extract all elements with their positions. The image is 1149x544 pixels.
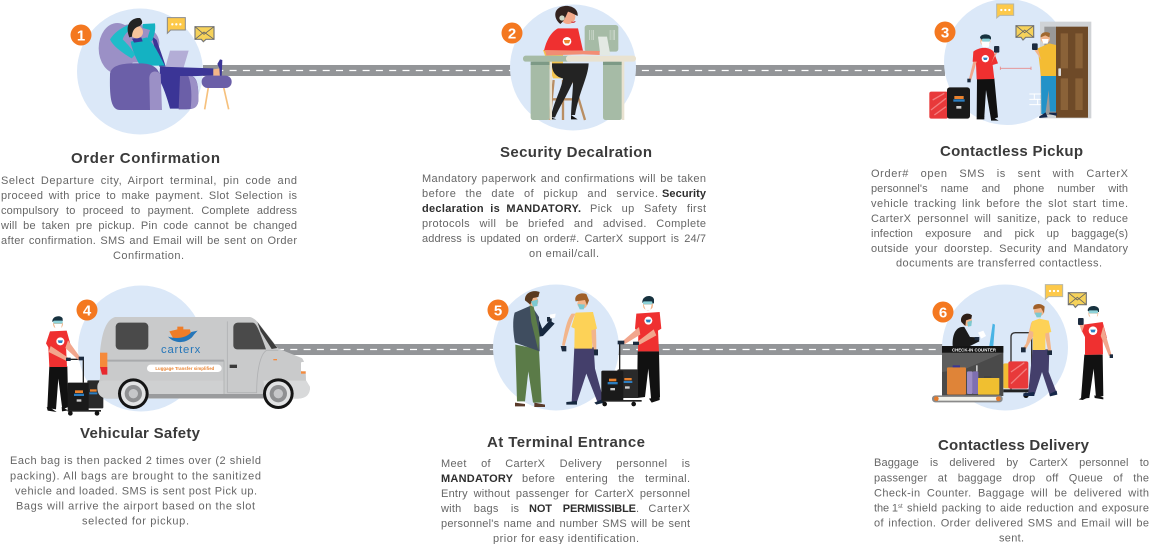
illustration: agent at desk <box>510 4 636 130</box>
label: van pill <box>147 365 222 372</box>
label: van pill: Luggage Transfer simplified <box>155 366 215 371</box>
badge: number 1 <box>70 24 92 46</box>
text block: contactless pickup: infection exposure and pick up baggage(s) <box>871 228 1128 240</box>
text block: contactless delivery <box>874 457 1149 544</box>
text block: at terminal entrance: NOT PERMISSIBLE <box>529 503 636 515</box>
text block: contactless delivery: shield packing to aide reduction and exposure <box>907 502 1149 514</box>
text block: vehicular safety: selected for pickup. <box>82 516 189 528</box>
badge: number 6 <box>932 302 954 322</box>
panel: step 5 at terminal entrance <box>440 284 691 544</box>
badge: number 1: 1 <box>77 28 85 44</box>
text block: at terminal entrance: MANDATORY <box>441 473 514 485</box>
text block: contactless delivery: st <box>898 504 903 510</box>
badge: number 4 <box>76 300 98 320</box>
text block: security declaration: Security <box>662 188 707 200</box>
panel: step 1 order confirmation <box>0 8 298 262</box>
text block: vehicular safety: Each bag is then packed 2 times over (2 shield <box>10 455 261 467</box>
badge: number 3 <box>934 22 956 42</box>
text block: contactless pickup: vehicle tracking link before the slot start time. <box>871 198 1128 210</box>
text block: at terminal entrance: Meet of CarterX Delivery personnel is <box>441 458 690 470</box>
text block: at terminal entrance <box>440 458 691 544</box>
road: bottom row <box>270 344 944 355</box>
logo: carterx on van: carterx <box>161 344 201 356</box>
text block: vehicular safety <box>10 455 261 528</box>
illustration: passengers and courier at terminal <box>493 284 661 410</box>
icon: chat bubble <box>167 18 185 33</box>
icon: envelope <box>1068 293 1086 307</box>
text block: at terminal entrance: personnel's name and number SMS will be sent <box>441 518 690 530</box>
panel: step 6 contactless delivery <box>874 284 1149 544</box>
badge: number 2: 2 <box>508 26 516 42</box>
heading: contactless pickup: Contactless Pickup <box>940 143 1083 160</box>
text block: security declaration: on email/call. <box>529 248 599 260</box>
panel: step 4 vehicular safety <box>10 286 310 528</box>
icon: envelope <box>195 27 214 42</box>
badge: number 4: 4 <box>83 302 92 320</box>
illustration: courier with trolley and van <box>46 286 310 416</box>
text block: security declaration: protocols will be briefed and advised. Complete <box>422 218 706 230</box>
text block: security declaration: declaration is MANDATORY. <box>422 203 581 215</box>
panel: step 2 security declaration <box>422 4 707 260</box>
logo: carterx on van <box>161 327 201 356</box>
badge: number 6: 6 <box>939 304 947 322</box>
text block: contactless pickup: documents are transferred contactless. <box>896 258 1102 270</box>
label: check-in counter: CHECK-IN COUNTER <box>952 348 997 352</box>
heading: at terminal entrance: At Terminal Entrance <box>487 434 645 451</box>
road: top row <box>203 65 945 76</box>
text block: vehicular safety: vehicle and loaded. SMS is sent post Pick up. <box>15 486 257 498</box>
text block: security declaration <box>422 173 707 260</box>
heading: contactless delivery: Contactless Delivery <box>938 437 1090 454</box>
text block: security declaration: before the date of pickup and service. <box>422 188 658 200</box>
text block: contactless delivery: Baggage is delivered by CarterX personnel to <box>874 457 1149 469</box>
text block: vehicular safety: packing). All bags are brought to the sanitized <box>10 470 261 482</box>
text block: order confirmation: Select Departure city, Airport terminal, pin code and <box>1 175 297 187</box>
text block: at terminal entrance: . CarterX <box>636 503 691 515</box>
text block: contactless delivery: passenger at baggage drop off Queue of the <box>874 472 1149 484</box>
text block: order confirmation <box>0 175 298 262</box>
text block: contactless delivery: Check-in Counter. Baggage will be delivered with <box>874 488 1149 500</box>
text block: contactless pickup: CarterX personnel will sanitize, pack to reduce <box>871 213 1128 225</box>
text block: order confirmation: will be taken pre pickup. Pin code cannot be changed <box>0 220 297 232</box>
text block: contactless delivery: the 1 <box>874 502 898 514</box>
text block: at terminal entrance: Entry without passenger for CarterX personnel <box>441 488 690 500</box>
text block: security declaration: Pick up Safety first <box>590 203 706 215</box>
heading: order confirmation: Order Confirmation <box>71 150 220 167</box>
icon: chat bubble <box>997 4 1014 18</box>
illustration: check-in counter and courier <box>932 284 1113 410</box>
illustration: courier and customer at door <box>929 0 1091 125</box>
badge: number 5: 5 <box>494 302 502 320</box>
text block: at terminal entrance: before entering the terminal. <box>522 473 690 485</box>
text block: contactless delivery: of infection. Order delivered SMS and Email will be <box>874 518 1149 530</box>
panel: step 3 contactless pickup <box>871 0 1129 270</box>
text block: contactless pickup: outside your doorstep. Security and Mandatory <box>871 243 1128 255</box>
text block: order confirmation: Confirmation. <box>113 250 184 262</box>
text block: contactless pickup <box>871 168 1129 270</box>
text block: order confirmation: compulsory to proceed to payment. Complete address <box>1 205 298 217</box>
text block: contactless pickup: Order# open SMS is sent with CarterX <box>871 168 1129 180</box>
badge: number 2 <box>502 22 522 44</box>
illustration: man relaxing in armchair <box>77 8 232 134</box>
text block: order confirmation: after confirmation. SMS and Email will be sent on Order <box>1 235 297 247</box>
text block: order confirmation: proceed with price to make payment. Slot Selection is <box>1 190 298 202</box>
badge: number 5 <box>488 300 508 320</box>
text block: contactless pickup: personnel's name and phone number with <box>871 183 1128 195</box>
text block: security declaration: Mandatory paperwork and confirmations will be taken <box>422 173 706 185</box>
text block: at terminal entrance: with bags is <box>440 503 520 515</box>
text block: vehicular safety: Bags will arrive the airport based on the slot <box>16 500 255 512</box>
heading: vehicular safety: Vehicular Safety <box>80 425 201 442</box>
icon: chat bubble <box>1045 285 1063 299</box>
icon: envelope <box>1016 26 1034 40</box>
heading: security decalration: Security Decalration <box>500 144 652 161</box>
badge: number 3: 3 <box>941 24 949 42</box>
text block: security declaration: address is updated on order#. CarterX support is 24/7 <box>422 233 706 245</box>
